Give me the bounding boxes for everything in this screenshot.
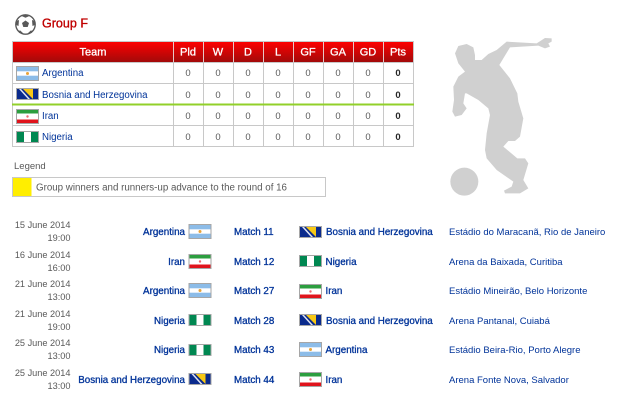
table header: GD (360, 46, 376, 58)
fixture: Match 12: Match 12 (234, 257, 274, 268)
fixture: Match 11: Argentina (143, 227, 186, 238)
fixture: Match 44: Match 44 (234, 375, 275, 386)
fixture: Match 28: 19:00 (48, 322, 70, 332)
row: Argentina: 0 (365, 68, 371, 79)
fixture: Match 12: Nigeria (326, 257, 357, 268)
row: Argentina (16, 66, 401, 81)
row: Iran: 0 (365, 111, 371, 122)
fixture: Match 12: 16:00 (48, 263, 70, 273)
row: Iran: Iran (42, 111, 59, 122)
legend: Group winners and runners-up advance to the round of 16 (36, 182, 287, 194)
row: Argentina: Argentina (42, 68, 84, 79)
row: Bosnia and Herzegovina: 0 (395, 90, 401, 101)
row: Argentina: 0 (395, 68, 401, 79)
row: Iran: 0 (395, 111, 401, 122)
fixture: Match 43: Nigeria (154, 345, 186, 356)
row: Nigeria: 0 (185, 132, 191, 143)
legend (12, 178, 326, 196)
row: Argentina: 0 (335, 68, 341, 79)
row: Nigeria: 0 (215, 132, 221, 143)
row: Nigeria: 0 (395, 132, 401, 143)
fixture: Match 12: 16 June 2014 (15, 250, 70, 260)
fixture: Match 27: Match 27 (234, 286, 274, 297)
qualification line (12, 104, 414, 106)
row: Iran: 0 (335, 111, 341, 122)
fixture: Match 44: Iran (326, 375, 342, 386)
fixture: Match 43: Estádio Beira-Rio, Porto Alegre (449, 345, 580, 356)
row: Bosnia and Herzegovina (16, 88, 401, 101)
row: Nigeria (16, 131, 401, 143)
fixture: Match 43: Match 43 (234, 345, 275, 356)
fixture: Match 11: Match 11 (234, 227, 274, 238)
table header: W (213, 46, 224, 58)
fixture: Match 43: Argentina (326, 345, 368, 356)
row: Iran (16, 109, 401, 124)
row: Argentina: 0 (185, 68, 191, 79)
row: Iran: 0 (185, 111, 191, 122)
row: Bosnia and Herzegovina: 0 (185, 90, 191, 101)
fixture: Match 28: 21 June 2014 (15, 309, 70, 319)
fixture: Match 12: Iran (168, 257, 185, 268)
fixture: Match 28: Match 28 (234, 316, 275, 327)
fixture: Match 28 (15, 309, 551, 332)
row: Bosnia and Herzegovina: 0 (245, 90, 251, 101)
table header: Pts (390, 46, 406, 58)
row: Bosnia and Herzegovina: Bosnia and Herzegovina (42, 90, 148, 101)
fixture: Match 27: 21 June 2014 (15, 279, 70, 289)
fixture: Match 43: 25 June 2014 (15, 338, 70, 348)
row: Bosnia and Herzegovina: 0 (365, 90, 371, 101)
legend heading: Legend (14, 161, 46, 172)
fixture: Match 27: 13:00 (48, 292, 70, 302)
fixture: Match 43: 13:00 (48, 351, 70, 361)
row: Argentina: 0 (245, 68, 251, 79)
row: Nigeria: 0 (335, 132, 341, 143)
fixture: Match 27: Estádio Mineirão, Belo Horizonte (449, 286, 587, 297)
fixture: Match 28: Nigeria (154, 316, 186, 327)
fixture: Match 11: Bosnia and Herzegovina (326, 227, 433, 238)
table: Group F standings (12, 42, 414, 146)
fixture: Match 44 (15, 368, 569, 391)
fixture: Match 27 (15, 279, 587, 302)
row: Argentina: 0 (215, 68, 221, 79)
row: Argentina: 0 (275, 68, 281, 79)
row: Nigeria: 0 (245, 132, 251, 143)
silhouette: football player (450, 38, 552, 196)
fixture: Match 12: Arena da Baixada, Curitiba (449, 257, 563, 268)
table header: D (244, 46, 252, 58)
row: Nigeria: 0 (305, 132, 311, 143)
row: Nigeria: 0 (365, 132, 371, 143)
row: Nigeria: 0 (275, 132, 281, 143)
table header: GA (330, 46, 347, 58)
row: Iran: 0 (275, 111, 281, 122)
row: Iran: 0 (305, 111, 311, 122)
row: Bosnia and Herzegovina: 0 (275, 90, 281, 101)
row: Iran: 0 (215, 111, 221, 122)
fixture: Match 11: Estádio do Maracanã, Rio de Janeiro (449, 227, 605, 238)
fixture: Match 11: 15 June 2014 (15, 220, 70, 230)
table header: Pld (180, 46, 196, 58)
fixture: Match 44: Arena Fonte Nova, Salvador (449, 375, 569, 386)
row: Nigeria: Nigeria (42, 132, 73, 143)
row: Iran: 0 (245, 111, 251, 122)
title: Group F (42, 16, 88, 30)
row: Bosnia and Herzegovina: 0 (305, 90, 311, 101)
table header (12, 42, 414, 62)
table header: L (275, 46, 281, 58)
row: Bosnia and Herzegovina: 0 (215, 90, 221, 101)
row: Argentina: 0 (305, 68, 311, 79)
icon: soccer ball (16, 15, 35, 34)
fixture: Match 11: 19:00 (48, 233, 70, 243)
fixture: Match 43 (15, 338, 580, 361)
fixture: Match 11 (15, 220, 605, 243)
fixture: Match 27: Iran (326, 286, 342, 297)
fixture: Match 12 (15, 250, 563, 273)
fixture: Match 27: Argentina (143, 286, 186, 297)
table header: GF (300, 46, 316, 58)
fixture: Match 44: 13:00 (48, 381, 70, 391)
fixture: Match 44: Bosnia and Herzegovina (78, 375, 186, 386)
row: Bosnia and Herzegovina: 0 (335, 90, 341, 101)
fixture: Match 28: Bosnia and Herzegovina (326, 316, 433, 327)
table header: Team (80, 46, 106, 58)
fixture: Match 44: 25 June 2014 (15, 368, 70, 378)
fixture: Match 28: Arena Pantanal, Cuiabá (449, 316, 551, 327)
